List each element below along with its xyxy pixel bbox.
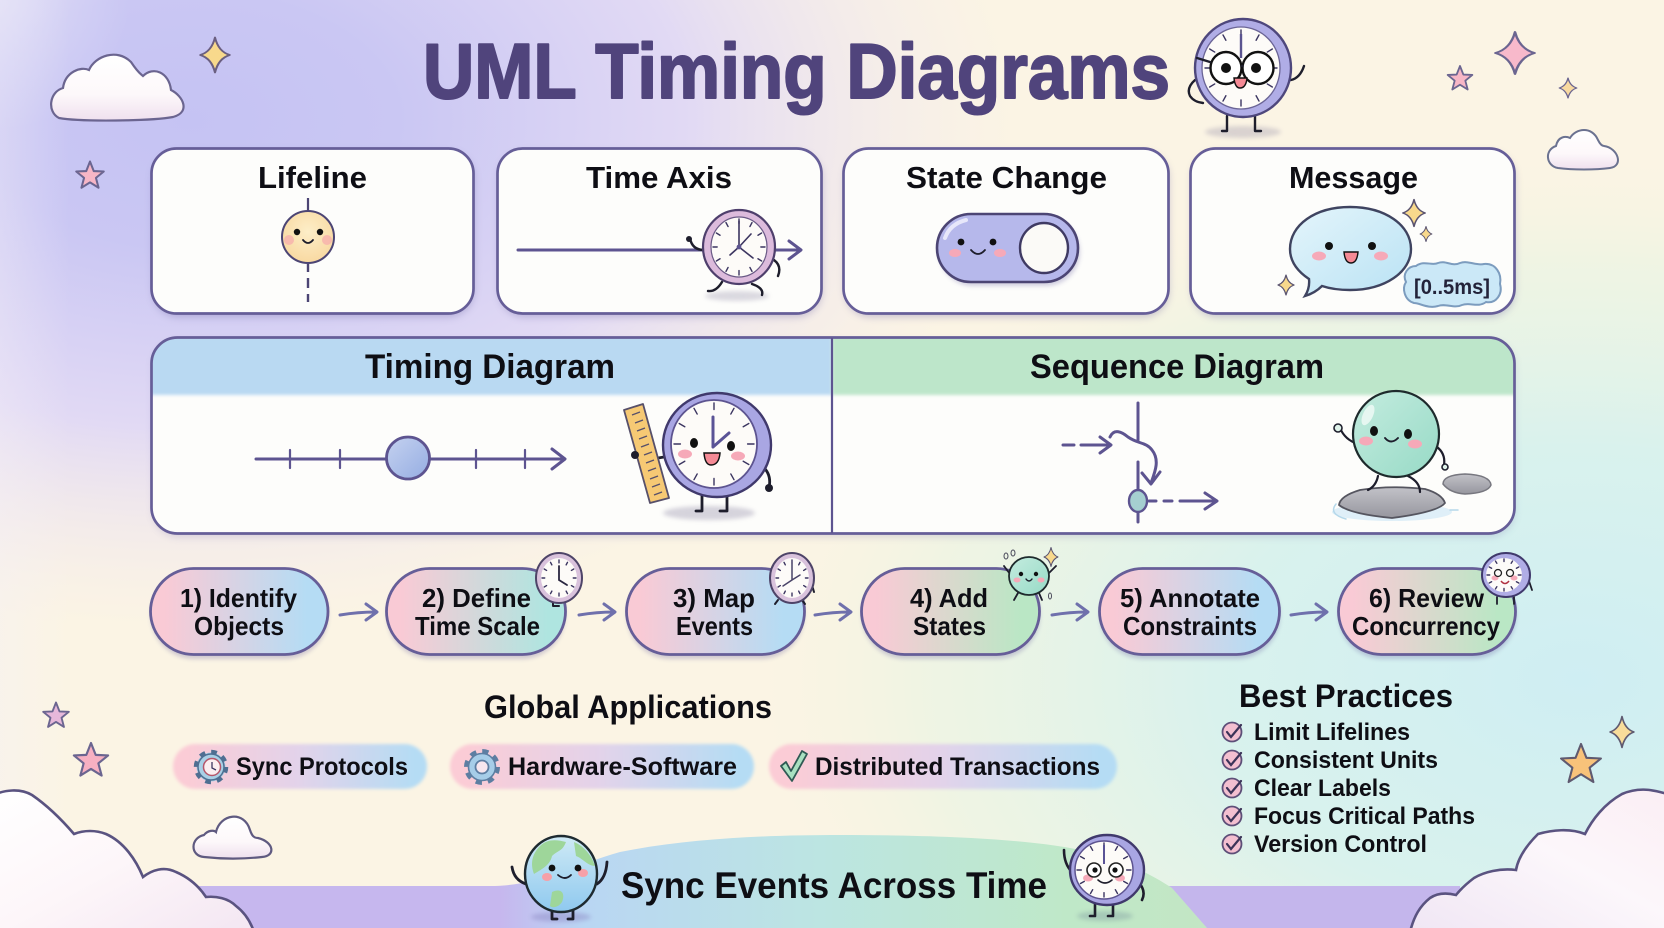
callout: time constraint: [0..5ms] xyxy=(1414,275,1490,299)
bottom green and blue hill xyxy=(470,835,1207,928)
panel: Message xyxy=(1190,148,1515,317)
step 5: Annotate Constraints: 5) Annotate xyxy=(1120,583,1260,613)
icon: green check xyxy=(781,751,807,781)
cloud: large bottom right xyxy=(1410,790,1664,928)
icon: gold sparkle top left xyxy=(200,38,230,72)
icon: smiling lifeline node xyxy=(282,198,334,302)
panel: State Change xyxy=(844,148,1169,317)
step 1: Identify Objects: Objects xyxy=(194,611,284,641)
flow: six process steps xyxy=(150,548,1532,659)
item: Clear Labels: Clear Labels xyxy=(1254,775,1391,802)
panel: Lifeline xyxy=(152,148,474,317)
icon: title clock mascot with glasses xyxy=(1189,19,1304,138)
cloud: top left xyxy=(51,55,184,121)
item: Focus Critical Paths: Focus Critical Paths xyxy=(1254,803,1475,830)
step 3: Map Events: 3) Map xyxy=(673,583,755,613)
icon: small gold sparkle top right xyxy=(1559,78,1577,98)
icon: gold sparkle lower right xyxy=(1610,716,1634,748)
step 1: Identify Objects xyxy=(150,568,328,659)
arrow: step 1 to 2 xyxy=(340,604,377,620)
icon: pink star lower left xyxy=(74,743,108,776)
heading: Message: Message xyxy=(1289,160,1418,195)
heading: Time Axis: Time Axis xyxy=(586,160,732,195)
heading: Timing Diagram: Timing Diagram xyxy=(365,348,615,386)
icon: small clock on step 3 xyxy=(770,553,814,604)
icon: gold sparkle small xyxy=(1420,226,1432,242)
callout: time constraint xyxy=(1404,262,1501,307)
step 3: Map Events: Events xyxy=(676,611,753,641)
item: Limit Lifelines: Limit Lifelines xyxy=(1254,719,1410,746)
pill: Distributed Transactions xyxy=(769,744,1117,789)
icon: gold sparkle left xyxy=(1278,275,1294,295)
icon: clock mascot bottom right xyxy=(1064,835,1144,921)
cloud: top right xyxy=(1548,130,1618,170)
step 1: Identify Objects: 1) Identify xyxy=(180,583,298,613)
icon: pink star top right xyxy=(1448,66,1472,90)
icon: green mascot on stepping stones xyxy=(1332,391,1491,521)
icon: clock mascot with ruler xyxy=(624,393,773,520)
icon: toggle switch xyxy=(937,214,1080,286)
step 2: Define Time Scale: 2) Define xyxy=(422,583,531,613)
step 4: Add States: 4) Add xyxy=(910,583,988,613)
icon: gear xyxy=(467,752,497,782)
pill: Hardware-Software xyxy=(450,744,754,789)
step 6: Review Concurrency xyxy=(1338,568,1516,659)
chart: sequence flow arrows xyxy=(1063,403,1217,522)
heading: State Change: State Change xyxy=(906,160,1107,195)
section: Best Practices list xyxy=(1222,678,1475,858)
icon: pink sparkle top right xyxy=(1495,32,1535,74)
icon: small clock on step 2 xyxy=(536,553,582,606)
panel: Time Axis xyxy=(498,148,822,317)
step 6: Review Concurrency: 6) Review xyxy=(1369,583,1485,613)
icon: gold sparkle large xyxy=(1403,200,1425,226)
item: Consistent Units: Consistent Units xyxy=(1254,747,1438,774)
pill: Sync Protocols: Sync Protocols xyxy=(236,753,408,781)
arrow: step 2 to 3 xyxy=(579,604,615,620)
arrow: time axis line xyxy=(518,241,801,259)
icon: pink star left xyxy=(76,162,104,188)
step 4: Add States xyxy=(862,568,1040,659)
panel: comparison of diagrams xyxy=(140,330,1532,537)
step 2: Define Time Scale xyxy=(386,568,566,659)
heading: Global Applications: Global Applications xyxy=(484,689,772,725)
tagline: Sync Events Across Time xyxy=(621,865,1047,906)
step 6: Review Concurrency: Concurrency xyxy=(1352,611,1500,641)
arrow: step 4 to 5 xyxy=(1052,604,1088,620)
step 3: Map Events xyxy=(626,568,804,659)
icon: small green mascot on step 4 xyxy=(1004,548,1058,600)
pill: Hardware-Software: Hardware-Software xyxy=(508,753,737,781)
pill: Distributed Transactions: Distributed Transactions xyxy=(815,753,1100,781)
icon: globe mascot xyxy=(512,836,607,922)
icon: speech bubble mascot xyxy=(1290,207,1411,296)
step 5: Annotate Constraints xyxy=(1100,568,1280,659)
heading: Best Practices: Best Practices xyxy=(1239,678,1453,714)
icon: small clock on step 6 xyxy=(1482,553,1532,604)
step 2: Define Time Scale: Time Scale xyxy=(415,611,540,641)
icon: lavender star lower left xyxy=(43,702,69,727)
step 4: Add States: States xyxy=(913,611,986,641)
item: Version Control: Version Control xyxy=(1254,831,1427,858)
section: Global Applications xyxy=(173,689,1117,789)
icon: running clock mascot xyxy=(686,210,779,301)
bottom lavender ground band xyxy=(190,886,1460,928)
step 5: Annotate Constraints: Constraints xyxy=(1123,611,1257,641)
chart: timing axis with ticks xyxy=(256,437,565,479)
arrow: step 5 to 6 xyxy=(1291,604,1327,620)
arrow: step 3 to 4 xyxy=(815,604,851,620)
cloud: small lower left xyxy=(194,817,271,858)
heading: Sequence Diagram: Sequence Diagram xyxy=(1030,348,1324,386)
pill: Sync Protocols xyxy=(173,744,427,789)
heading: Lifeline: Lifeline xyxy=(258,160,367,195)
title: UML Timing Diagrams xyxy=(423,27,1170,115)
icon: gear with clock xyxy=(196,752,226,782)
cloud: large bottom left xyxy=(0,790,254,928)
icon: orange star lower right xyxy=(1561,744,1601,782)
